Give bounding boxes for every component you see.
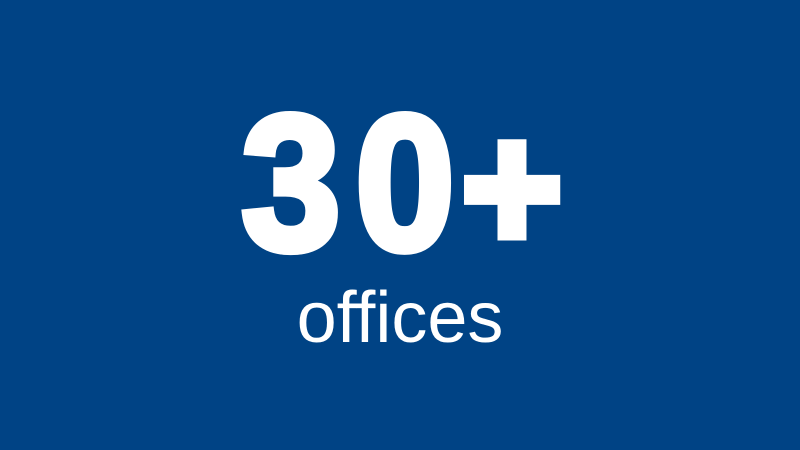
big number: + bbox=[462, 88, 562, 288]
big number bbox=[241, 75, 562, 290]
big number: 0 bbox=[355, 75, 455, 290]
big number: 3 bbox=[241, 75, 341, 290]
label: offices: offices bbox=[297, 278, 503, 358]
